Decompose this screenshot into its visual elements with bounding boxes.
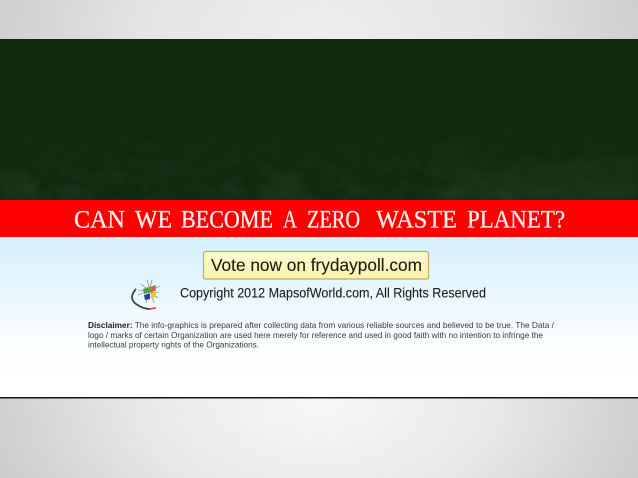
title: WE: [135, 206, 172, 234]
disclaimer text block: intellectual property rights of the Organizations.: [88, 340, 259, 350]
bottom border line: [0, 397, 638, 398]
copyright text: Copyright 2012 MapsofWorld.com, All Rights Reserved: [180, 286, 486, 300]
title: ZERO: [307, 206, 360, 234]
disclaimer text block: Disclaimer: The info-graphics is prepared after collecting data from various reliable sources and believed to be true. The Data /: [88, 320, 555, 330]
panel: dark green banner: [0, 39, 638, 200]
faded landfill texture: [4, 167, 636, 200]
disclaimer text block: [88, 320, 555, 350]
icon: MapsofWorld logo: [132, 280, 160, 309]
callout: vote button: [204, 252, 428, 279]
panel: light blue lower section: [0, 237, 638, 397]
slide background top: [0, 0, 638, 39]
slide background bottom: [0, 398, 638, 478]
title: PLANET?: [467, 206, 565, 234]
disclaimer text block: logo / marks of certain Organization are used here merely for reference and used in good faith with no intention to infringe the: [88, 330, 543, 340]
title: [74, 206, 565, 234]
panel: red title band: [0, 200, 638, 237]
title: WASTE: [376, 206, 457, 234]
title: BECOME: [181, 206, 273, 234]
title: CAN: [74, 206, 125, 234]
vote text: Vote now on frydaypoll.com: [211, 255, 422, 275]
title: A: [283, 206, 297, 234]
